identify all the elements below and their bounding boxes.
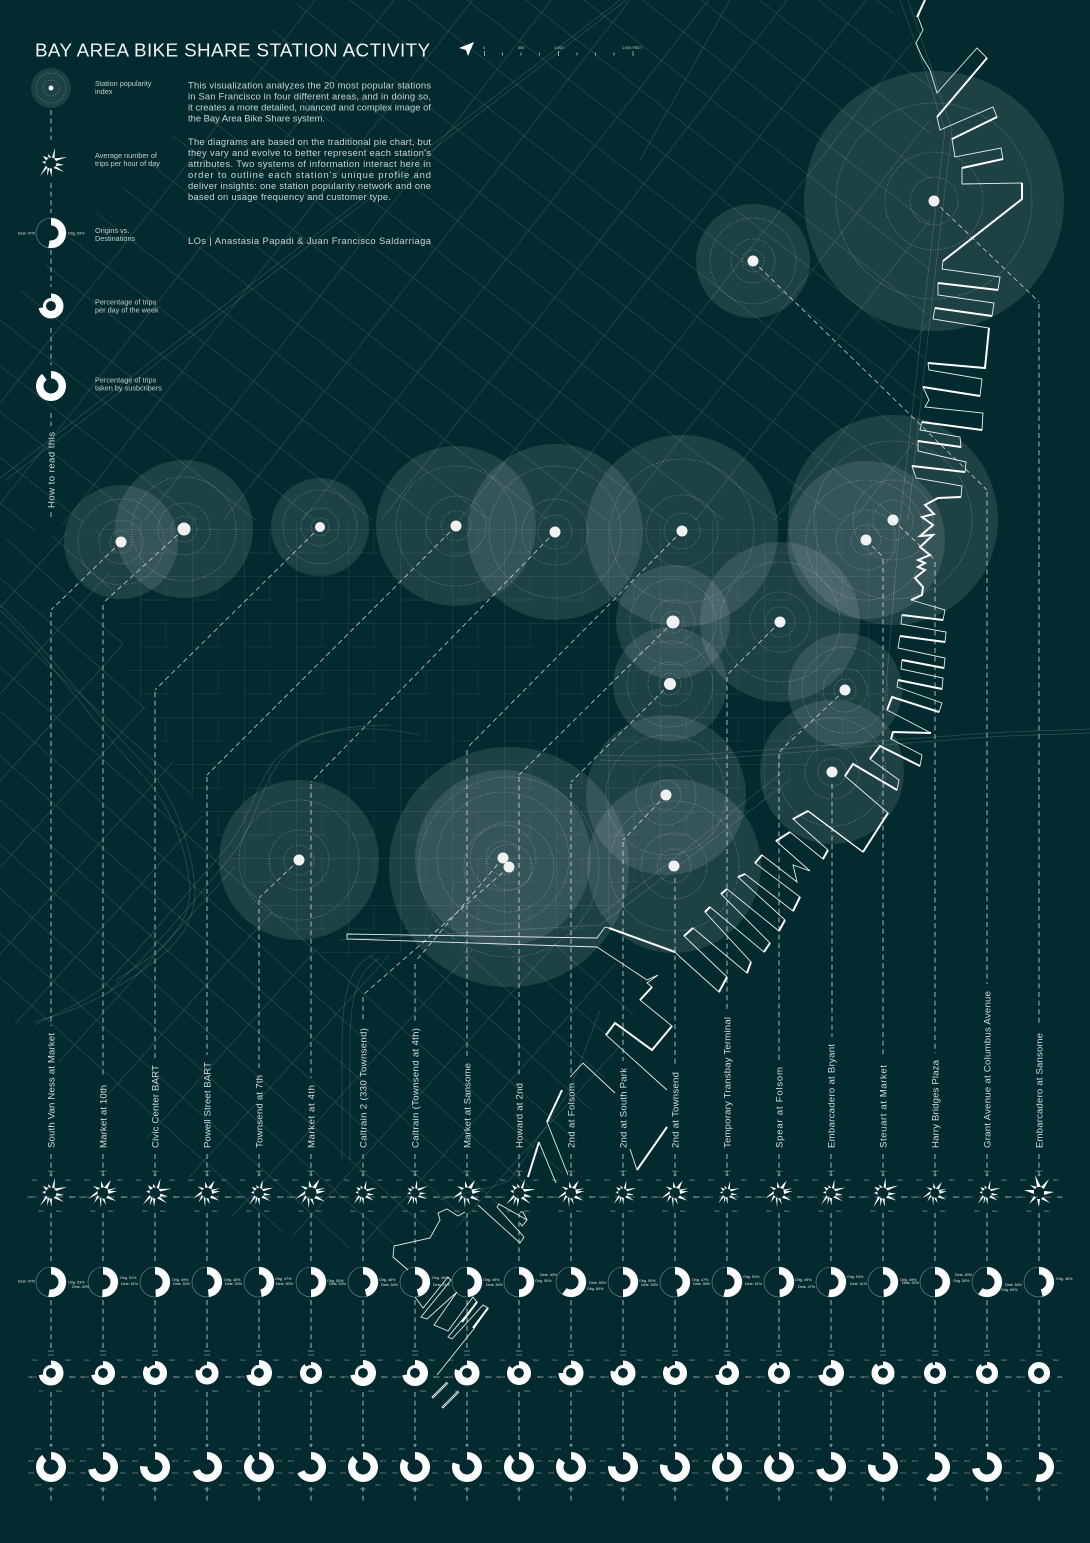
station: Steuart at Market	[787, 461, 945, 619]
station centre dots	[116, 196, 940, 872]
row: origins vs destinations rings	[18, 1267, 1073, 1297]
credits: LOs | Anastasia Papadi & Juan Francisco Saldarriaga	[188, 235, 432, 246]
row: origins vs destinations rings: Dest. 50%	[589, 1281, 607, 1285]
station: Harry Bridges Plaza	[788, 415, 998, 625]
row: origins vs destinations rings: Dest. 40%	[955, 1273, 973, 1277]
legend icon: station popularity	[31, 68, 71, 108]
station column labels: Spear at Folsom	[774, 1067, 786, 1148]
legend icon: origins vs destinations: Orig. 53%	[68, 232, 85, 236]
station column labels: Market at 4th	[306, 1085, 318, 1148]
waterfront piers	[347, 0, 1022, 1408]
row: origins vs destinations rings: Dest. 51%	[433, 1283, 451, 1287]
row: origins vs destinations rings: Orig. 50%	[327, 1279, 344, 1283]
scale bar: 0	[483, 46, 485, 50]
row: origins vs destinations rings: Dest. 50%	[276, 1282, 294, 1286]
station: Townsend at 7th	[219, 780, 379, 940]
station column labels: Caltrain 2 (330 Townsend)	[358, 1028, 370, 1148]
row: origins vs destinations rings: Dest. 46%	[693, 1282, 711, 1286]
legend icon: origins vs destinations: Dest. 47%	[18, 232, 36, 236]
intro text: This visualization analyzes the 20 most popular stations	[188, 80, 431, 90]
intro text: in San Francisco in four different areas, and in doing so,	[188, 90, 431, 102]
row: origins vs destinations rings: Dest. 53%	[641, 1283, 659, 1287]
scale bar: 1,000 FEET	[622, 46, 643, 50]
row: trips per day of week	[42, 1364, 1047, 1382]
row: origins vs destinations rings: Orig. 48%	[224, 1278, 241, 1282]
row: percentage of trips by subscribers	[40, 1456, 1050, 1478]
station column labels: Temporary Transbay Terminal	[722, 1017, 734, 1148]
intro text: it creates a more detailed, nuanced and complex image of	[188, 102, 431, 112]
station column labels	[46, 991, 1046, 1148]
row: origins vs destinations rings: Dest. 49%	[72, 1285, 90, 1289]
station column labels: Harry Bridges Plaza	[930, 1059, 942, 1148]
row: origins vs destinations rings: Orig. 53%	[847, 1275, 864, 1279]
row: origins vs destinations rings: Dest. 47%	[798, 1285, 816, 1289]
legend heading: how to read this: How to read this	[46, 432, 58, 508]
station: Market at 4th	[467, 444, 643, 620]
row: origins vs destinations rings: Dest. 50%	[902, 1281, 920, 1285]
leader lines from stations to columns	[30, 201, 1062, 1503]
station column labels: Market at 10th	[98, 1085, 110, 1148]
legend icon: subscribers	[40, 375, 62, 397]
row: origins vs destinations rings: Orig. 50%	[953, 1279, 970, 1283]
legend text: trips per hour: Average number of	[95, 151, 157, 160]
station: 2nd at South Park	[586, 715, 746, 875]
row: origins vs destinations rings: Orig. 50%	[639, 1279, 656, 1283]
legend icon: trips per day of week	[42, 297, 60, 315]
legend icon: trips per hour	[40, 148, 67, 177]
legend text: trips per hour: trips per hour of day	[95, 159, 160, 168]
row: origins vs destinations rings: Orig. 53%	[68, 1280, 85, 1284]
row: origins vs destinations rings: Dest. 50%	[486, 1283, 504, 1287]
legend text: station popularity: index	[95, 87, 113, 96]
station column labels: 2nd at Townsend	[670, 1072, 682, 1148]
station: Civic Center BART	[271, 478, 369, 576]
station: 2nd at Folsom	[613, 627, 727, 741]
legend icon: origins vs destinations	[18, 218, 85, 248]
row: origins vs destinations rings: Dest. 40%	[540, 1273, 558, 1277]
row: origins vs destinations rings: Dest. 51%	[745, 1282, 763, 1286]
row: origins vs destinations rings: Orig. 46%	[379, 1278, 396, 1282]
station: 2nd at Townsend	[587, 779, 761, 953]
row: origins vs destinations rings: Orig. 49%	[795, 1278, 812, 1282]
station: Embarcadero at Bryant	[760, 700, 904, 844]
row: origins vs destinations rings: Dest. 51%	[850, 1282, 868, 1286]
station column labels: Howard at 2nd	[514, 1083, 526, 1148]
row: origins vs destinations rings: Orig. 49%	[172, 1278, 189, 1282]
legend text: subscribers: Percentage of trips	[95, 376, 156, 384]
intro text: they vary and evolve to better represent each station's	[188, 147, 431, 158]
row: origins vs destinations rings: Orig. 46%	[432, 1276, 449, 1280]
intro text: deliver insights: one station popularity network and one	[188, 180, 431, 191]
legend text: station popularity: Station popularity	[95, 79, 151, 88]
row: origins vs destinations rings: Dest. 54%	[381, 1283, 399, 1287]
row: origins vs destinations rings: Orig. 51%	[120, 1276, 137, 1280]
scale bar	[483, 46, 643, 56]
row: subscriber tick labels	[25, 1442, 1065, 1492]
row: origins vs destinations rings: Orig. 60%	[587, 1287, 604, 1291]
row: origins vs destinations rings: Dest. 53%	[225, 1282, 243, 1286]
station column labels: 2nd at Folsom	[566, 1083, 578, 1148]
station column labels: Embarcadero at Sansome	[1034, 1033, 1046, 1148]
intro text: attributes. Two systems of information interact here in	[188, 158, 431, 169]
legend text: origins vs destinations: Origins vs.	[95, 226, 129, 235]
row: origins vs destinations rings: Dest. 51%	[121, 1282, 139, 1286]
row: origins vs destinations rings: Dest. 52%	[173, 1282, 191, 1286]
row: origins vs destinations rings: Dest. 54%	[1005, 1283, 1023, 1287]
icon: north arrow	[459, 42, 474, 56]
intro text: The diagrams are based on the traditional pie chart, but	[188, 136, 431, 147]
title: BAY AREA BIKE SHARE STATION ACTIVITY	[35, 40, 430, 60]
row: origins vs destinations rings: Orig. 47%	[692, 1278, 709, 1282]
intro text: order to outline each station's unique profile and	[188, 169, 431, 180]
station column labels: Embarcadero at Bryant	[826, 1044, 838, 1148]
station: Caltrain 2 (330 Townsend)	[389, 747, 629, 987]
station: Spear at Folsom	[788, 633, 902, 747]
legend text: trips per day of week: per day of the week	[95, 306, 159, 314]
station column labels: Grant Avenue at Columbus Avenue	[982, 991, 994, 1148]
intro text	[188, 80, 431, 202]
station: Embarcadero at Sansome	[804, 71, 1064, 331]
station: Temporary Transbay Terminal	[700, 542, 860, 702]
station column labels: South Van Ness at Market	[46, 1033, 58, 1148]
legend text: origins vs destinations: Destinations	[95, 234, 136, 243]
row: origins vs destinations rings: Orig. 49%	[483, 1278, 500, 1282]
row: origins vs destinations rings: Orig. 60%	[1001, 1288, 1018, 1292]
station: Howard at 2nd	[616, 565, 730, 679]
row: hour-of-day tick labels	[25, 1168, 1065, 1218]
station column labels: Market at Sansome	[462, 1063, 474, 1148]
station column labels: Steuart at Market	[878, 1065, 890, 1148]
station: South Van Ness at Market	[64, 485, 178, 599]
row: origins vs destinations rings: Orig. 54%	[743, 1275, 760, 1279]
station: Powell Street BART	[376, 446, 536, 606]
panel: how to read this legend	[18, 68, 162, 520]
intro text: the Bay Area Bike Share system.	[188, 112, 325, 124]
row: origins vs destinations rings: Orig. 50%	[535, 1279, 552, 1283]
station popularity network	[64, 71, 1064, 987]
row: origins vs destinations rings: Dest. 54%	[329, 1282, 347, 1286]
legend text: trips per day of week: Percentage of trips	[95, 298, 156, 306]
intro text: based on usage frequency and customer type.	[188, 191, 391, 202]
station: Market at Sansome	[586, 435, 778, 627]
station column labels: Civic Center BART	[150, 1065, 162, 1148]
station: Grant Avenue at Columbus Avenue	[696, 204, 810, 318]
station: Market at 10th	[115, 460, 253, 598]
row: trips per hour bursts	[40, 1175, 1054, 1209]
legend text: subscribers: taken by susbcribers	[95, 384, 162, 392]
row: origins vs destinations rings: Orig. 47%	[275, 1277, 292, 1281]
station column labels: Powell Street BART	[202, 1062, 214, 1148]
scale bar: 1,000	[554, 46, 564, 50]
station column labels: Caltrain (Townsend at 4th)	[410, 1028, 422, 1148]
row: origins vs destinations rings: Orig. 49%	[900, 1278, 917, 1282]
station: Caltrain (Townsend at 4th)	[415, 770, 591, 946]
row: origins vs destinations rings: Dest. 47%	[18, 1280, 36, 1284]
scale bar: 500	[518, 46, 524, 50]
station column labels: 2nd at South Park	[618, 1068, 630, 1148]
row: origins vs destinations rings: Orig. 46%	[1056, 1277, 1073, 1281]
row: day-of-week tick labels	[25, 1348, 1065, 1398]
station column labels: Townsend at 7th	[254, 1075, 266, 1148]
